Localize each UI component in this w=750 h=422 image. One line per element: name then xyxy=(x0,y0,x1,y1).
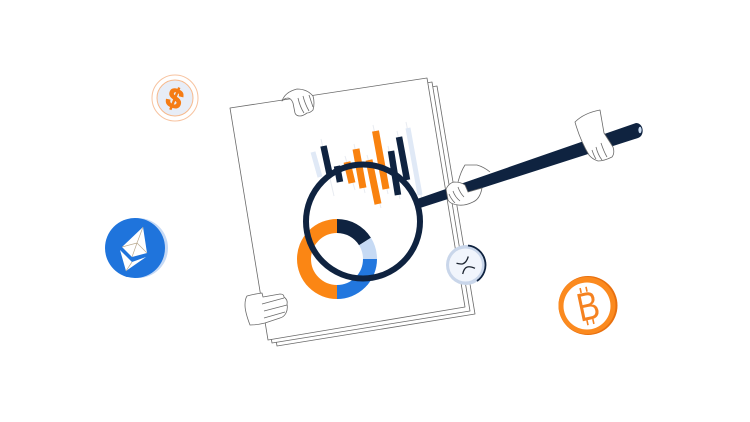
coin: ripple xyxy=(446,245,486,285)
coin: dollar xyxy=(152,75,198,121)
coin: ethereum xyxy=(105,218,168,278)
navy candles xyxy=(324,137,407,195)
hand holding bottom of page xyxy=(245,293,287,325)
handle back hand xyxy=(458,165,490,182)
hand on handle end xyxy=(575,110,614,161)
coin: bitcoin: B xyxy=(573,282,603,330)
handle xyxy=(417,123,643,208)
hand on handle near lens xyxy=(446,182,482,205)
magnifying glass xyxy=(306,110,643,278)
candlestick chart xyxy=(313,122,422,208)
coin: dollar: $ xyxy=(162,81,188,116)
lens ring xyxy=(306,164,420,278)
hand holding top of page xyxy=(282,89,314,116)
light candles xyxy=(313,128,420,195)
orange candles xyxy=(347,131,386,204)
donut chart xyxy=(304,226,370,292)
document stack xyxy=(230,78,475,346)
coin: bitcoin xyxy=(558,276,618,335)
wicks xyxy=(321,122,422,208)
